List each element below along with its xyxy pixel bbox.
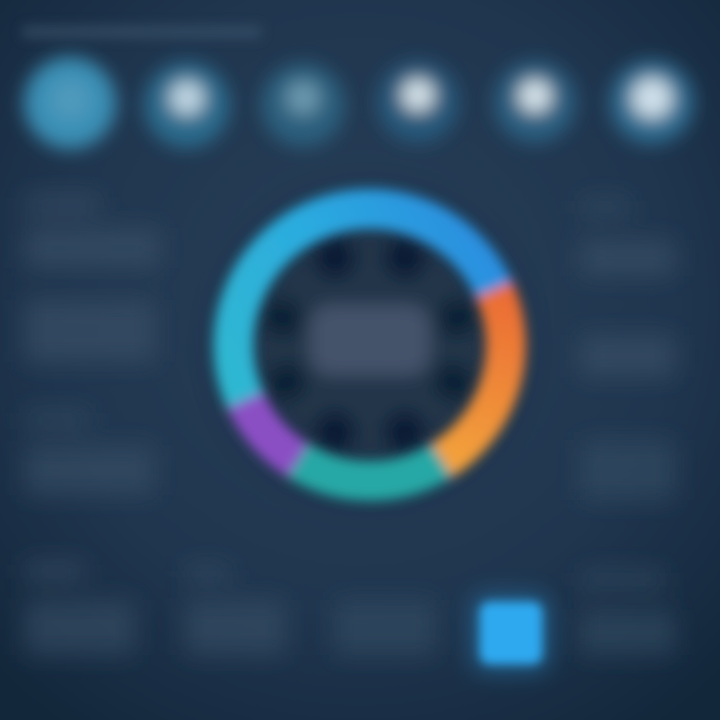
icon: circle 1 xyxy=(24,57,116,149)
icon: circle 6 xyxy=(610,60,694,144)
segment: teal xyxy=(298,460,442,481)
icon: circle 2 xyxy=(144,62,230,148)
ring segments xyxy=(234,209,506,481)
inner dial xyxy=(255,230,485,460)
square glow xyxy=(472,594,550,672)
panel: right text blocks xyxy=(580,198,675,500)
segment: purple xyxy=(245,400,298,460)
icon: circle 4 xyxy=(377,61,459,143)
segment: blue xyxy=(234,209,494,400)
panel: bottom text blocks xyxy=(25,562,675,655)
donut chart xyxy=(220,195,520,495)
icon: circle 5 xyxy=(494,61,576,143)
panel: left text blocks xyxy=(25,195,160,495)
square xyxy=(480,602,542,664)
chart shadow xyxy=(220,195,520,495)
segment: orange xyxy=(442,290,506,460)
icon row xyxy=(24,57,694,149)
icon: blue square xyxy=(472,594,550,672)
icon: circle 3 xyxy=(261,63,345,147)
title bar xyxy=(22,26,262,38)
